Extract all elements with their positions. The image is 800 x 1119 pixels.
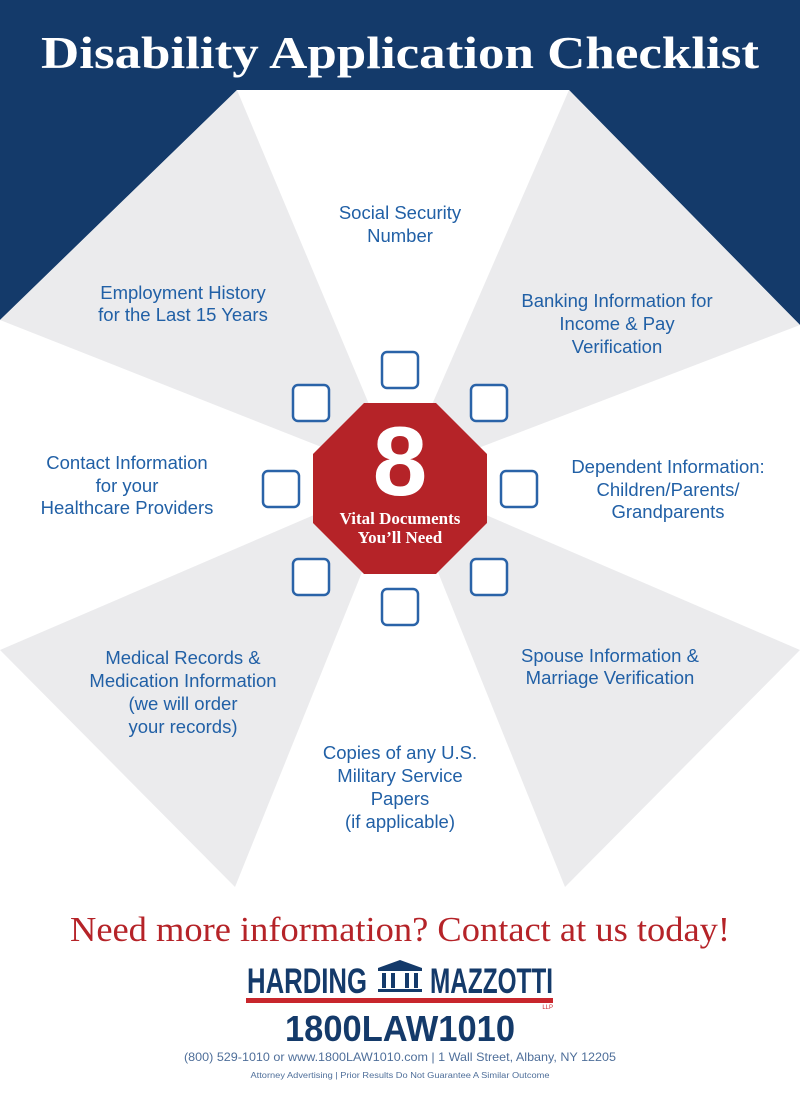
item: dependent [571, 456, 765, 522]
center octagon badge [313, 403, 487, 574]
navy header background [0, 0, 800, 325]
item: employment: for the Last 15 Years [98, 304, 268, 325]
item: social security: Social Security [339, 202, 462, 223]
logo [246, 960, 553, 1049]
item: medical: your records) [129, 716, 237, 737]
call to action: Need more information? Contact at us today! [70, 910, 730, 949]
item: spouse: Marriage Verification [526, 667, 694, 688]
logo: HARDING [247, 962, 367, 1001]
item: military: (if applicable) [345, 811, 455, 832]
item: employment [98, 282, 268, 325]
item: military: Military Service [337, 765, 463, 786]
item: military: Copies of any U.S. [323, 742, 477, 763]
item: banking [521, 290, 713, 357]
item: dependent: Children/Parents/ [597, 479, 740, 500]
item: spouse [521, 645, 700, 688]
contact line: (800) 529-1010 or www.1800LAW1010.com | 1 Wall Street, Albany, NY 12205 [184, 1050, 616, 1064]
disclaimer: Attorney Advertising | Prior Results Do Not Guarantee A Similar Outcome [250, 1071, 550, 1080]
item: social security: Number [367, 225, 433, 246]
item: medical [89, 647, 277, 737]
item: dependent: Dependent Information: [571, 456, 765, 477]
item: contact healthcare: for your [96, 475, 158, 496]
checkboxes [263, 352, 537, 625]
item: medical: (we will order [129, 693, 237, 714]
item: banking: Verification [572, 336, 662, 357]
center octagon badge: Vital Documents [340, 509, 461, 528]
sunburst rays [0, 90, 800, 887]
logo: MAZZOTTI [430, 962, 553, 1001]
logo: 1800LAW1010 [285, 1008, 515, 1049]
item: military: Papers [371, 788, 429, 809]
title: Disability Application Checklist [41, 27, 760, 78]
item: contact healthcare: Contact Information [46, 452, 208, 473]
item: medical: Medical Records & [105, 647, 261, 668]
item: banking: Income & Pay [559, 313, 675, 334]
item: employment: Employment History [100, 282, 267, 303]
item: contact healthcare [41, 452, 213, 518]
item: medical: Medication Information [89, 670, 277, 691]
item: banking: Banking Information for [521, 290, 713, 311]
item: contact healthcare: Healthcare Providers [41, 497, 213, 518]
item: social security [339, 202, 462, 246]
center octagon badge: You’ll Need [358, 528, 443, 547]
logo: LLP [542, 1005, 553, 1011]
center octagon badge: 8 [373, 406, 427, 516]
item: dependent: Grandparents [611, 501, 725, 522]
item: military [323, 742, 477, 832]
item: spouse: Spouse Information & [521, 645, 700, 666]
